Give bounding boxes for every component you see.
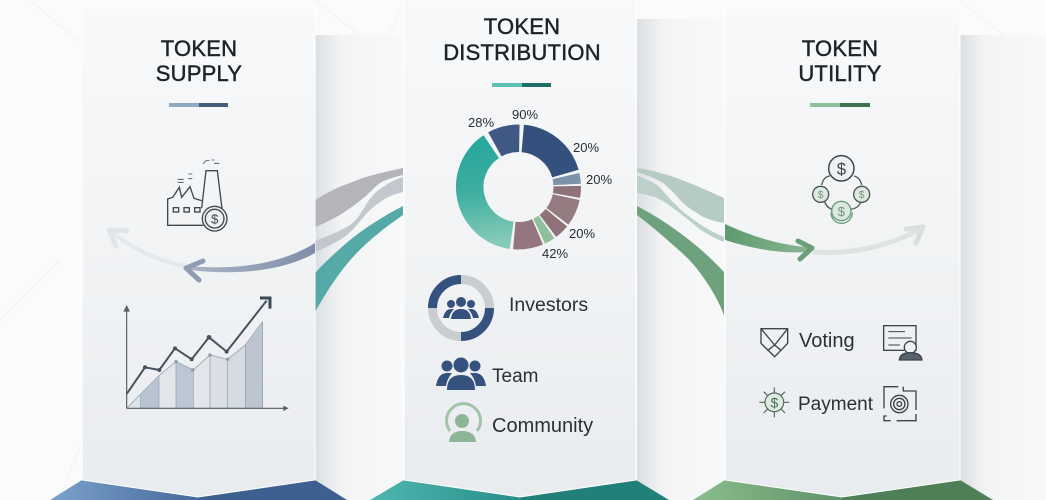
arrow: faded supply arrow	[109, 230, 186, 266]
heading: token distribution: DISTRIBUTION	[443, 40, 601, 65]
heading underline	[492, 83, 551, 87]
arrow: utility inflow	[725, 224, 812, 259]
donut percentage labels: 20%	[586, 172, 612, 187]
base band: utility	[693, 480, 993, 500]
ribbons: distribution to utility	[637, 168, 724, 315]
item: payment: Payment	[798, 394, 874, 415]
icon: factory with coin: $	[211, 211, 219, 226]
heading: token utility: TOKEN	[802, 36, 878, 61]
icon: voting shield	[761, 329, 788, 357]
panel: token utility	[725, 8, 960, 497]
icon: factory with coin	[168, 160, 227, 231]
ribbons: supply to distribution	[315, 168, 403, 312]
side strip: left gap	[315, 35, 404, 500]
arrow: faded utility arrow	[813, 227, 923, 253]
item: voting	[761, 329, 855, 357]
donut percentage labels: 90%	[512, 107, 538, 122]
legend: investors: Investors	[509, 294, 588, 316]
legend: team: Team	[492, 366, 538, 387]
icon: target maze	[884, 387, 916, 421]
side strip: middle gap	[637, 19, 725, 500]
legend: team	[436, 358, 538, 390]
donut percentage labels: 20%	[569, 226, 595, 241]
legend: community: Community	[492, 415, 593, 437]
heading: token utility	[798, 36, 882, 86]
icon: token cycle coins: $	[838, 204, 846, 219]
heading: token supply: TOKEN	[161, 36, 237, 61]
heading underline	[810, 103, 870, 107]
icon: token cycle coins: $	[837, 160, 846, 179]
item: payment	[759, 387, 874, 417]
heading underline	[169, 103, 228, 107]
legend: community	[446, 404, 593, 442]
base band: distribution	[370, 480, 669, 500]
icon: payment sun coin: $	[770, 394, 778, 410]
side strip: right edge	[960, 35, 1046, 500]
donut percentage labels: 42%	[542, 246, 568, 261]
panel: token distribution	[404, 0, 636, 497]
heading: token supply	[156, 36, 242, 86]
icon: token cycle coins: $	[818, 190, 824, 201]
icon: certificate with person	[884, 326, 922, 360]
heading: token supply: SUPPLY	[156, 61, 242, 86]
heading: token distribution	[443, 14, 601, 65]
icon: investors ring	[432, 280, 490, 336]
heading: token utility: UTILITY	[798, 61, 882, 86]
donut percentage labels: 20%	[573, 140, 599, 155]
legend: investors	[432, 280, 588, 336]
panel: token supply	[82, 8, 315, 497]
chart: rising supply	[123, 298, 289, 411]
base band: supply	[50, 480, 347, 500]
donut percentage labels: 28%	[468, 115, 494, 130]
item: voting: Voting	[799, 330, 855, 352]
arrow: supply outflow	[186, 243, 315, 280]
icon: community	[446, 404, 480, 442]
icon: token cycle coins	[813, 156, 870, 223]
donut chart	[450, 118, 587, 256]
heading: token distribution: TOKEN	[484, 14, 560, 39]
donut percentage labels	[468, 107, 612, 261]
icon: team	[436, 358, 486, 390]
icon: token cycle coins: $	[859, 190, 865, 201]
